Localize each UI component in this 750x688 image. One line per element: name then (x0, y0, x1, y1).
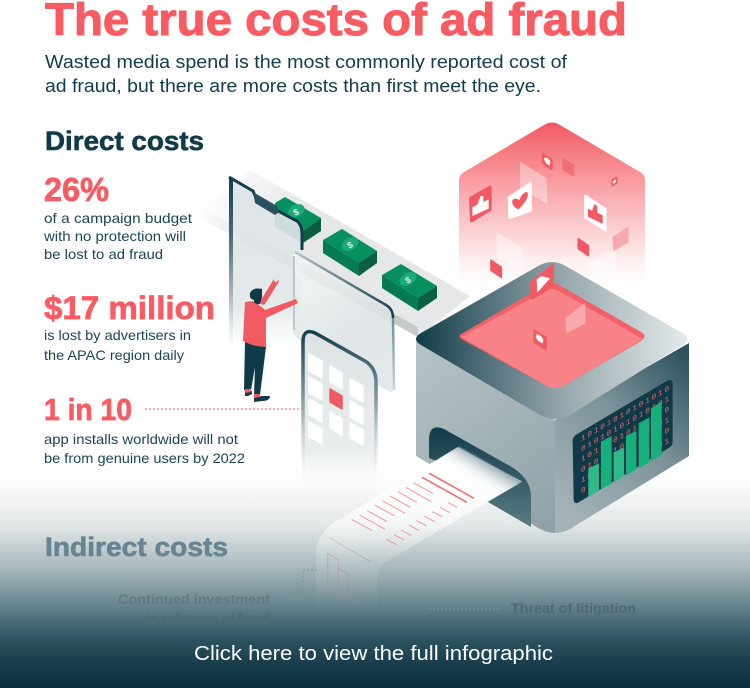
head (250, 288, 262, 304)
pink tile (613, 228, 628, 250)
icon: thumbs up white (585, 196, 605, 230)
paper bar chart (328, 538, 370, 604)
conveyor belt (200, 170, 470, 337)
faded tile (563, 159, 574, 176)
intro text (45, 52, 568, 96)
background fade (0, 468, 750, 688)
pool tiles (531, 265, 585, 350)
legs (244, 342, 266, 395)
solid tiles (491, 239, 588, 277)
stat: 26%: 26% (44, 171, 109, 208)
stat: $17 million: the APAC region daily (44, 347, 184, 363)
reaction pool rim (460, 283, 644, 388)
binary digits: 01010101010101 (581, 436, 671, 496)
binary digits: 10101010101010 (581, 425, 671, 486)
stat: 26%: with no protection will (43, 228, 186, 244)
faded label: continued investment: in solutions of fraud (146, 610, 270, 626)
translucent tiles (497, 162, 616, 290)
data screen (573, 380, 673, 503)
app grid panel (303, 332, 376, 490)
raised arm (263, 281, 276, 302)
stat: $17 million: is lost by advertisers in (44, 327, 191, 343)
money stack 1: $ (291, 207, 301, 218)
icon: share tile (531, 265, 553, 299)
intro text: ad fraud, but there are more costs than first meet the eye. (45, 76, 541, 96)
binary digits: 01010101010101 (581, 394, 671, 454)
money stack 1 (275, 197, 321, 243)
faded label: continued investment: Continued investment (118, 591, 270, 607)
money stack 3: $ (403, 275, 413, 286)
stat: 1 in 10: 1 in 10 (44, 392, 132, 427)
glass phone panel (229, 177, 302, 345)
money stack 2 (323, 229, 377, 276)
app tiles (309, 354, 363, 445)
paper heading lines (422, 473, 474, 502)
heading: direct costs: Direct costs (45, 126, 204, 156)
socks (245, 389, 260, 398)
opening (429, 427, 531, 527)
binary digits: 01010101010101 (581, 415, 671, 475)
binary digits (581, 384, 671, 496)
stat: 1 in 10 (44, 392, 245, 466)
hologram of social reactions (459, 122, 645, 300)
faded label: continued investment (118, 591, 270, 626)
icon: heart on pool (534, 330, 546, 350)
stat: $17 million (44, 290, 215, 363)
machine left face (416, 340, 555, 533)
stat: 26% (43, 171, 192, 262)
binary digits: 10101010101010 (581, 384, 671, 444)
heading: indirect costs: Indirect costs (45, 532, 228, 562)
stat: 1 in 10: be from genuine users by 2022 (44, 450, 245, 466)
intro text: Wasted media spend is the most commonly reported cost of (45, 52, 568, 72)
paper strip (316, 447, 522, 620)
money stack 3 (382, 264, 437, 311)
machine top face (416, 262, 688, 419)
icon: heart white (509, 183, 531, 218)
faded label: threat of litigation: Threat of litigation (511, 600, 636, 616)
highlighted tile (330, 389, 342, 409)
money stack 2: $ (345, 240, 355, 251)
shoes (245, 391, 270, 402)
stat: 26%: of a campaign budget (44, 210, 192, 226)
stat: 26%: be lost to ad fraud (44, 246, 163, 262)
call to action: Click here to view the full infographic (194, 643, 553, 665)
green bars (588, 402, 662, 497)
binary digits: 10101010101010 (581, 404, 671, 465)
icon: tiny heart tile (612, 177, 617, 186)
dotted connector (145, 408, 302, 410)
icon: small heart tile (543, 154, 552, 169)
indirect connectors (283, 570, 500, 609)
paper shadow (432, 446, 522, 496)
machine right face (555, 343, 689, 533)
icon: thumbs up red (471, 187, 490, 221)
machine (316, 262, 689, 620)
pale tile (566, 303, 585, 333)
paper text lines (352, 483, 457, 545)
reaction pool (461, 289, 643, 388)
stat: 1 in 10: app installs worldwide will not (44, 431, 238, 447)
torso and arm (243, 299, 298, 347)
glass window panel (293, 252, 394, 392)
person pointing at screens (243, 275, 298, 402)
stat: $17 million: $17 million (44, 290, 215, 326)
